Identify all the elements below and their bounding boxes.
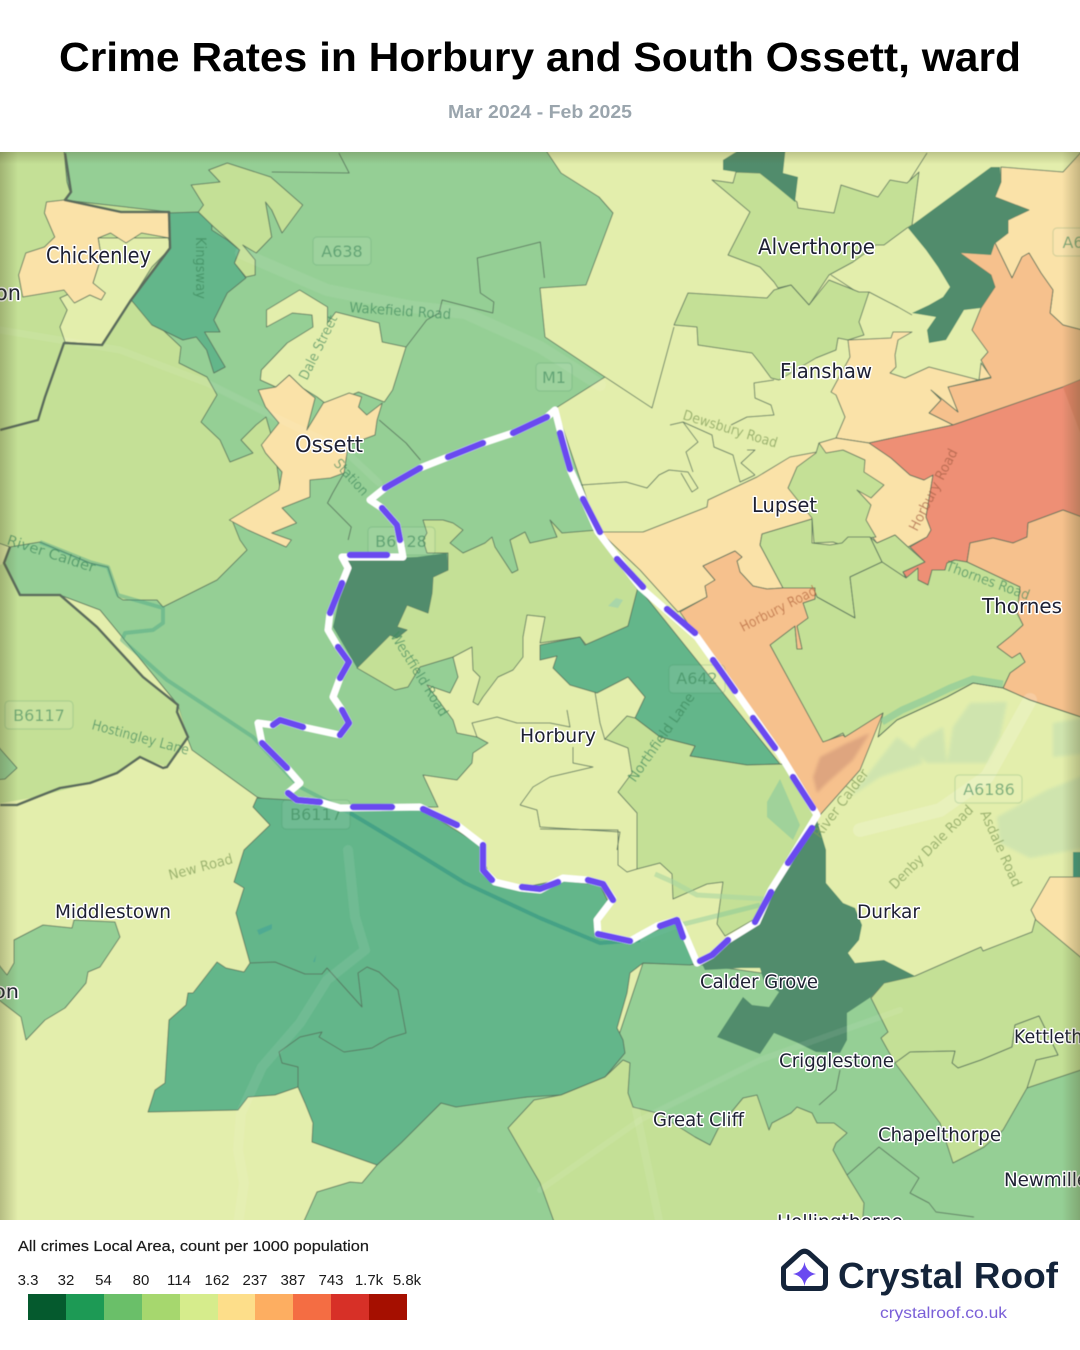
area: Thornes Park light green bbox=[770, 560, 1025, 743]
area: Middlestown medium green bbox=[0, 920, 120, 1040]
logo wordmark: Crystal Roof bbox=[838, 1255, 1059, 1296]
road labels: Northfield Lane bbox=[625, 690, 699, 785]
legend scale labels: 114 bbox=[167, 1272, 191, 1289]
legend scale labels: 237 bbox=[242, 1272, 268, 1289]
map road texture bbox=[0, 253, 1030, 1225]
road shields: B6117 bbox=[290, 805, 342, 824]
place labels bbox=[0, 235, 1080, 1233]
road labels: Horbury Road bbox=[906, 446, 961, 534]
area boundaries around Ossett bbox=[272, 153, 544, 540]
legend scale labels: 32 bbox=[58, 1272, 74, 1289]
subtitle: date range: Mar 2024 - Feb 2025 bbox=[448, 102, 632, 122]
legend scale labels bbox=[18, 1272, 422, 1289]
area: south-central inner boundary bbox=[250, 962, 406, 1087]
area: salmon darker corner bbox=[1062, 380, 1080, 429]
area: Durkar tan fragment bbox=[1031, 877, 1080, 965]
area: central-west medium green bbox=[0, 140, 613, 808]
lakes near Denby Dale Road bbox=[850, 702, 1080, 858]
area: Alverthorpe light green bbox=[712, 172, 919, 305]
place labels: Flanshaw bbox=[780, 359, 872, 383]
road labels: River Calder bbox=[810, 766, 873, 841]
road labels: Dale Street bbox=[296, 312, 341, 383]
area: Lupset north light green bbox=[788, 443, 884, 547]
legend scale labels: 162 bbox=[204, 1272, 230, 1289]
place labels: Hollingthorpe bbox=[777, 1211, 903, 1233]
area: Thornes orange bbox=[967, 510, 1080, 720]
area: salmon high-crime zone bbox=[869, 376, 1080, 585]
map edge vignette bbox=[0, 152, 1080, 1220]
area: Ossett pale north bbox=[260, 290, 406, 405]
area: ward A642 green bbox=[540, 587, 780, 765]
place labels: Ossett bbox=[295, 433, 363, 458]
road shields bbox=[5, 228, 1080, 829]
legend scale labels: 80 bbox=[133, 1272, 149, 1289]
area: far west medium fragment bbox=[0, 743, 17, 780]
area: Crigglestone dark green bbox=[700, 820, 915, 1054]
place labels: Great Cliff bbox=[653, 1109, 745, 1131]
river boundary east bbox=[878, 683, 1080, 737]
area: ward dark green bbox=[333, 553, 448, 668]
area: Horbury inner boundaries bbox=[472, 153, 974, 1217]
legend colour bar bbox=[28, 1294, 407, 1320]
place labels: Alverthorpe bbox=[758, 235, 875, 259]
logo: Crystal Roof bbox=[784, 1251, 1059, 1322]
area: Chickenley pale green bbox=[60, 238, 170, 345]
area: sewage works medium patch bbox=[767, 779, 800, 840]
river Calder: central reach bbox=[350, 813, 640, 943]
place labels: Chapelthorpe bbox=[878, 1124, 1001, 1146]
area: wedge darker patch bbox=[813, 733, 870, 793]
legend scale labels: 5.8k bbox=[393, 1272, 422, 1289]
place labels: Thornes bbox=[981, 594, 1062, 618]
area: north dark green bbox=[722, 152, 798, 202]
area: Great Cliff light green bbox=[508, 1060, 864, 1230]
area: north-east dark green bbox=[908, 167, 1029, 343]
area: Lupset south light green bbox=[760, 519, 882, 618]
road labels: Dewsbury Road bbox=[681, 408, 779, 451]
road shields: A642 bbox=[676, 669, 718, 688]
area: Ossett west cluster bbox=[19, 153, 544, 547]
road labels: Westfield Road bbox=[387, 630, 451, 720]
icon: house with star bbox=[784, 1251, 826, 1288]
road labels: Station bbox=[330, 456, 371, 499]
area: Chickenley tan bbox=[19, 200, 169, 303]
area: south-west light green below river bbox=[0, 563, 188, 805]
road labels: Denby Dale Road bbox=[887, 802, 977, 893]
road shields: M1 bbox=[542, 368, 566, 387]
area: Lupset east green sliver bbox=[870, 535, 925, 578]
road labels: Kingsway bbox=[192, 237, 208, 299]
road labels: Horbury Road bbox=[738, 583, 820, 636]
canal loop in ward bbox=[655, 874, 767, 899]
place labels: Crigglestone bbox=[779, 1050, 894, 1072]
place labels: Calder Grove bbox=[700, 971, 818, 993]
road labels: New Road bbox=[167, 851, 235, 884]
area: Chapelthorpe east light green bbox=[871, 917, 1080, 1088]
legend scale labels: 54 bbox=[95, 1272, 112, 1289]
area: east teal fragment bbox=[1073, 852, 1080, 877]
road shields: B6117 bbox=[13, 706, 65, 725]
road labels: Thornes Road bbox=[943, 558, 1032, 604]
legend scale labels: 387 bbox=[280, 1272, 306, 1289]
area: Ossett tan bbox=[229, 375, 382, 547]
ward boundary: Horbury and South Ossett bbox=[258, 410, 817, 963]
area: south medium green bbox=[300, 963, 1080, 1230]
small ponds bbox=[257, 598, 623, 962]
road labels: Hostingley Lane bbox=[90, 717, 191, 759]
road labels: Asdale Road bbox=[976, 808, 1024, 890]
river Calder: east reach bbox=[640, 905, 760, 940]
area: north Ossett light green bbox=[191, 163, 303, 277]
road labels: River Calder bbox=[5, 533, 97, 576]
area: Lupset tan bbox=[600, 438, 933, 612]
legend title: All crimes Local Area, count per 1000 population bbox=[18, 1238, 369, 1255]
river Calder: west reach bbox=[40, 542, 350, 813]
road labels: Wakefield Road bbox=[349, 300, 452, 323]
place labels: Middlestown bbox=[55, 901, 171, 923]
place labels: Durkar bbox=[857, 901, 920, 923]
legend scale labels: 743 bbox=[318, 1272, 344, 1289]
area: west light green bbox=[0, 140, 281, 607]
area: ward east light green bbox=[605, 716, 817, 936]
legend bbox=[18, 1238, 422, 1320]
place labels: Lupset bbox=[752, 493, 817, 517]
area: north-east tan bbox=[995, 148, 1080, 332]
road shields: A638 bbox=[321, 242, 363, 261]
logo url: crystalroof.co.uk bbox=[880, 1305, 1008, 1322]
legend scale labels: 1.7k bbox=[355, 1272, 384, 1289]
river strip along Thornes Park bbox=[882, 679, 1003, 722]
title: Crime Rates in Horbury and South Ossett, ward bbox=[59, 34, 1021, 80]
road labels bbox=[5, 237, 1032, 893]
area: south-central green bbox=[148, 798, 697, 1165]
road shields: B6128 bbox=[375, 532, 427, 551]
area: north-east orange bbox=[929, 243, 1080, 425]
area: Horbury ward light green bbox=[357, 520, 638, 705]
road shields: A6186 bbox=[963, 780, 1015, 799]
place labels: Horbury bbox=[520, 725, 596, 747]
thick boundary lines bbox=[0, 153, 188, 805]
place labels: Chickenley bbox=[46, 244, 151, 269]
area: Chapelthorpe centre light green bbox=[895, 1016, 1058, 1163]
legend scale labels: 3.3 bbox=[18, 1272, 38, 1289]
area: Horbury Road orange wedge bbox=[680, 551, 883, 815]
area: Flanshaw east tan bbox=[831, 332, 991, 443]
area: Kingsway green bbox=[131, 212, 246, 373]
area: Flanshaw light green bbox=[674, 280, 869, 380]
